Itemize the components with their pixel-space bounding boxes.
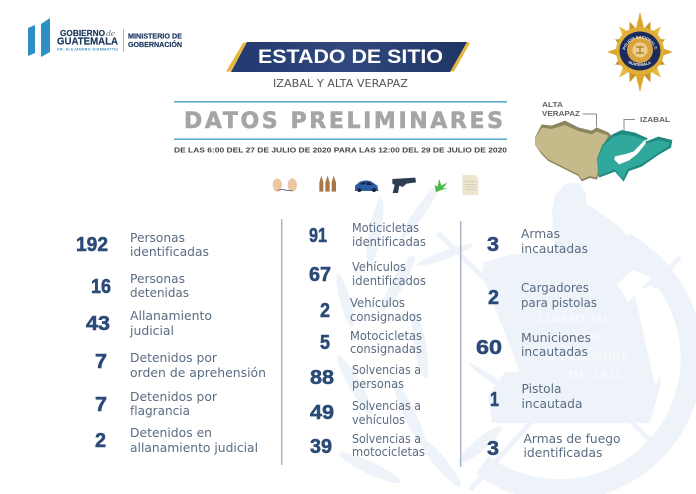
stat: 3 armas de fuego identificadas: Armas de fuego bbox=[524, 432, 620, 446]
panel: column 2 statistics bbox=[309, 221, 426, 459]
stat: 2 detenidos en allanamiento judicial: Detenidos en bbox=[130, 426, 212, 440]
stat: 16 personas detenidas: detenidas bbox=[130, 286, 189, 300]
stat: 2 detenidos en allanamiento judicial: 2 bbox=[95, 430, 106, 452]
icon: car bbox=[355, 180, 378, 192]
stat: 39 solvencias a motocicletas: motocicletas bbox=[352, 445, 425, 459]
background emblem watermark bbox=[333, 183, 692, 490]
stat: 2 detenidos en allanamiento judicial bbox=[95, 426, 258, 455]
background emblem watermark: SEPTIEMBRE bbox=[543, 351, 630, 363]
stat: 49 solvencias a vehículos bbox=[310, 399, 421, 427]
stat: 43 allanamiento judicial: Allanamiento bbox=[130, 309, 212, 323]
stat: 7 detenidos por orden de aprehensión bbox=[95, 351, 266, 380]
title banner: Estado de Sitio bbox=[226, 42, 470, 72]
stat: 2 vehículos consignados: consignados bbox=[350, 310, 422, 324]
stat: 16 personas detenidas bbox=[91, 272, 189, 300]
stat: 7 detenidos por flagrancia: Detenidos por bbox=[130, 390, 217, 404]
stat: 39 solvencias a motocicletas: Solvencias a bbox=[352, 432, 421, 446]
logo wordmark: MINISTERIO DE bbox=[128, 32, 182, 40]
map: Alta Verapaz and Izabal bbox=[535, 102, 672, 182]
subtitle: Izabal y Alta Verapaz: IZABAL Y ALTA VERAPAZ bbox=[273, 77, 408, 90]
stat: 7 detenidos por flagrancia bbox=[95, 390, 217, 418]
stat: 5 motocicletas consignadas: consignadas bbox=[350, 342, 422, 356]
icon: pistol bbox=[392, 178, 416, 193]
stat: 88 solvencias a personas: personas bbox=[352, 377, 404, 391]
stat: 3 armas de fuego identificadas: identificadas bbox=[524, 446, 602, 460]
stat: 43 allanamiento judicial: 43 bbox=[86, 313, 110, 335]
stat: 2 cargadores para pistolas bbox=[488, 281, 597, 310]
stat: 39 solvencias a motocicletas bbox=[310, 432, 425, 459]
logo wordmark: GOBIERNO bbox=[60, 28, 105, 38]
stat: 2 cargadores para pistolas: 2 bbox=[488, 287, 499, 309]
Izabal region bbox=[597, 130, 672, 182]
stat: 67 vehículos identificados: 67 bbox=[309, 264, 331, 286]
stat: 5 motocicletas consignadas bbox=[320, 329, 422, 356]
stat: 16 personas detenidas: 16 bbox=[91, 276, 111, 298]
background emblem watermark: 15 DE bbox=[575, 332, 605, 344]
logo wordmark: DR. ALEJANDRO GIAMMATTEI bbox=[57, 47, 118, 51]
stat: 3 armas incautadas: 3 bbox=[487, 234, 499, 256]
icon row bbox=[273, 175, 478, 195]
Alta Verapaz region bbox=[535, 121, 612, 181]
stat: 192 personas identificadas: 192 bbox=[76, 234, 108, 256]
stat: 88 solvencias a personas: 88 bbox=[310, 367, 334, 389]
stat: 2 vehículos consignados: Vehículos bbox=[350, 296, 405, 310]
stat: 7 detenidos por orden de aprehensión: 7 bbox=[95, 351, 107, 373]
stat: 60 municiones incautadas bbox=[476, 331, 591, 359]
stat: 43 allanamiento judicial: judicial bbox=[129, 324, 174, 338]
stat: 60 municiones incautadas: 60 bbox=[476, 337, 502, 359]
stat: 3 armas incautadas: incautadas bbox=[521, 242, 588, 256]
stat: 3 armas de fuego identificadas bbox=[487, 432, 620, 460]
stat: 49 solvencias a vehículos: 49 bbox=[310, 402, 334, 424]
stat: 2 vehículos consignados: 2 bbox=[320, 300, 330, 322]
stat: 1 pistola incautada: Pistola bbox=[522, 382, 562, 396]
police badge bbox=[607, 12, 673, 92]
icon: green leaf bbox=[435, 179, 448, 192]
stat: 192 personas identificadas: identificadas bbox=[130, 245, 209, 259]
stat: 43 allanamiento judicial bbox=[86, 309, 212, 338]
icon: handcuffed hands bbox=[273, 178, 297, 192]
stat: 2 detenidos en allanamiento judicial: allanamiento judicial bbox=[130, 441, 258, 455]
map labels bbox=[542, 102, 671, 131]
stat: 67 vehículos identificados bbox=[309, 260, 426, 288]
date range: DE LAS 6:00 DEL 27 DE JULIO DE 2020 PARA LAS 12:00 DEL 29 DE JULIO DE 2020 bbox=[174, 146, 507, 154]
background emblem watermark: DE 1821 bbox=[568, 369, 622, 381]
stat: 2 cargadores para pistolas: Cargadores bbox=[521, 281, 589, 295]
logo wordmark bbox=[57, 28, 182, 52]
stat: 7 detenidos por orden de aprehensión: Detenidos por bbox=[130, 351, 217, 365]
map labels: VERAPAZ bbox=[542, 111, 581, 118]
stat: 16 personas detenidas: Personas bbox=[130, 272, 185, 286]
map labels: ALTA bbox=[542, 102, 563, 109]
stat: 2 vehículos consignados bbox=[320, 296, 422, 324]
stat: 91 moticicletas identificadas: 91 bbox=[309, 225, 327, 247]
stat: 60 municiones incautadas: incautadas bbox=[521, 345, 588, 359]
stat: 192 personas identificadas: Personas bbox=[130, 231, 185, 245]
stat: 7 detenidos por flagrancia: 7 bbox=[95, 394, 107, 416]
icon: logo columns bbox=[28, 18, 50, 57]
stat: 2 cargadores para pistolas: para pistolas bbox=[521, 296, 597, 310]
stat: 49 solvencias a vehículos: vehículos bbox=[352, 413, 405, 427]
stat: 5 motocicletas consignadas: 5 bbox=[320, 332, 330, 354]
panel: column 3 statistics bbox=[476, 227, 620, 460]
stat: 5 motocicletas consignadas: Motocicletas bbox=[350, 329, 422, 343]
background emblem watermark: LIBERTAD bbox=[537, 313, 607, 325]
stat: 3 armas de fuego identificadas: 3 bbox=[487, 438, 499, 460]
stat: 60 municiones incautadas: Municiones bbox=[521, 331, 591, 345]
stat: 67 vehículos identificados: identificados bbox=[352, 274, 426, 288]
stat: 39 solvencias a motocicletas: 39 bbox=[310, 436, 332, 458]
logo: Gobierno de Guatemala, Ministerio de Gobernación bbox=[28, 18, 182, 57]
icon: bullets bbox=[319, 176, 336, 192]
stat: 3 armas incautadas bbox=[487, 227, 588, 256]
stat: 88 solvencias a personas: Solvencias a bbox=[352, 363, 421, 377]
stat: 49 solvencias a vehículos: Solvencias a bbox=[352, 399, 421, 413]
icon: document bbox=[462, 175, 478, 195]
stat: 88 solvencias a personas bbox=[310, 363, 421, 391]
stat: 91 moticicletas identificadas: identificadas bbox=[352, 235, 426, 249]
police badge: GUATEMALA bbox=[628, 61, 651, 66]
stat: 1 pistola incautada: incautada bbox=[522, 397, 582, 411]
title banner: Estado de Sitio: ESTADO DE SITIO bbox=[258, 47, 443, 68]
stat: 7 detenidos por flagrancia: flagrancia bbox=[130, 404, 190, 418]
stat: 192 personas identificadas bbox=[76, 231, 209, 259]
stat: 91 moticicletas identificadas bbox=[309, 221, 426, 249]
stat: 67 vehículos identificados: Vehículos bbox=[352, 260, 406, 274]
stat: 3 armas incautadas: Armas bbox=[521, 227, 560, 241]
logo wordmark: GUATEMALA bbox=[57, 36, 118, 48]
logo wordmark: GOBERNACIÓN bbox=[128, 40, 182, 49]
panel: column 1 statistics bbox=[76, 231, 266, 455]
stat: 91 moticicletas identificadas: Moticicletas bbox=[352, 221, 419, 235]
stat: 1 pistola incautada: 1 bbox=[490, 389, 499, 411]
map labels: IZABAL bbox=[640, 117, 671, 124]
stat: 7 detenidos por orden de aprehensión: orden de aprehensión bbox=[130, 366, 266, 380]
heading: Datos preliminares: DATOS PRELIMINARES bbox=[184, 109, 503, 134]
stat: 1 pistola incautada bbox=[490, 382, 582, 411]
logo wordmark: de bbox=[106, 29, 116, 38]
